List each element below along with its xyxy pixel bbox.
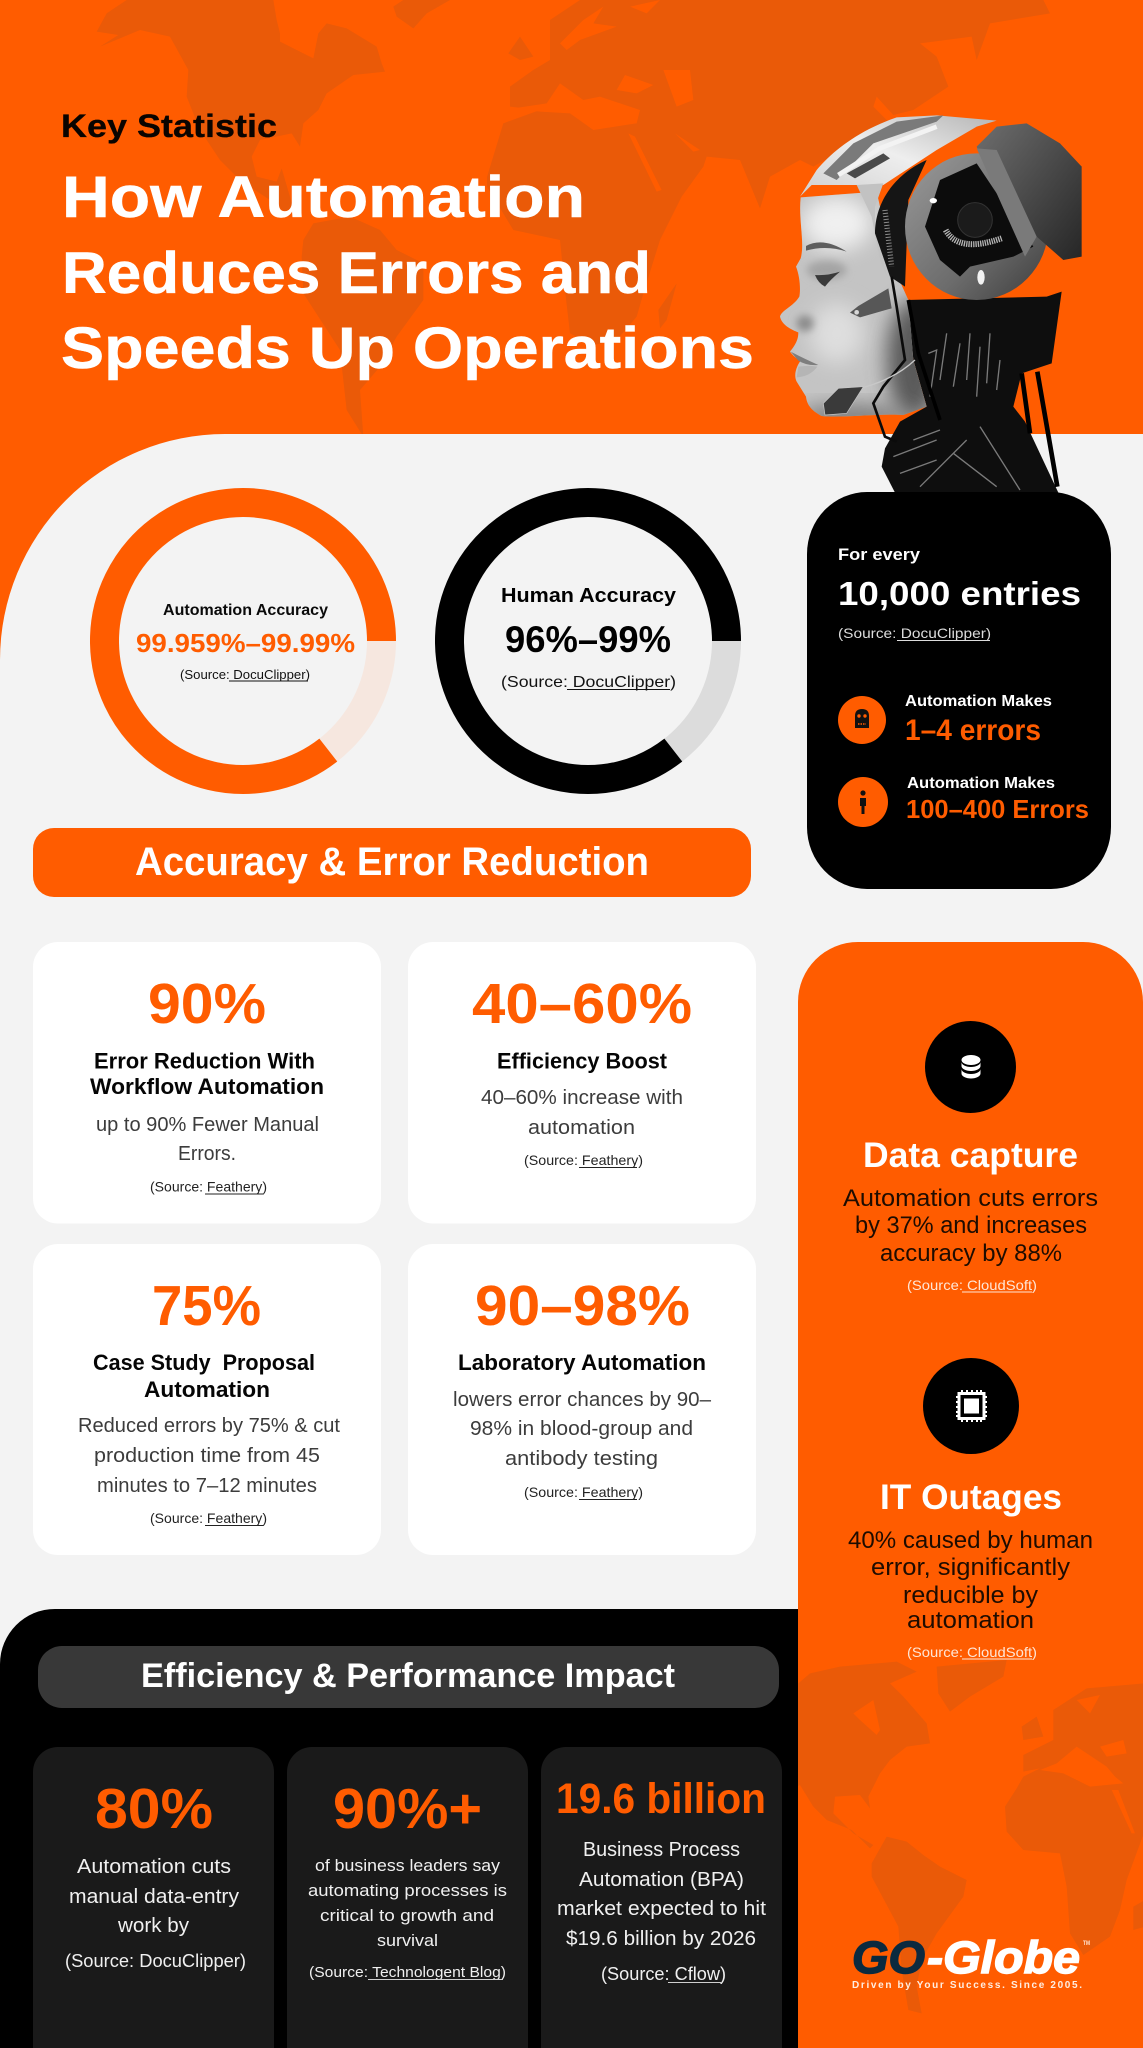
panel: orange side column bbox=[797, 942, 1143, 2048]
panel: for every 10,000 entries: (Source: DocuClipper) bbox=[838, 625, 991, 641]
stat: automation errors bbox=[905, 693, 1052, 747]
header background bbox=[0, 0, 1143, 700]
card: 90-98% laboratory automation: 90–98% bbox=[475, 1274, 690, 1338]
data capture text: accuracy by 88% bbox=[880, 1240, 1062, 1267]
card: 19.6 billion BPA market: 19.6 billion bbox=[556, 1775, 766, 1823]
card: 80% data entry: (Source: DocuClipper) bbox=[65, 1951, 246, 1971]
donut: human accuracy: Human Accuracy bbox=[501, 585, 677, 607]
card: 40-60% efficiency boost: 40–60% bbox=[472, 972, 692, 1036]
donut: automation accuracy bbox=[104, 502, 382, 780]
heading: accuracy and error reduction: Accuracy & Error Reduction bbox=[135, 840, 649, 884]
panel: for every 10,000 entries bbox=[807, 492, 1111, 889]
card: 90-98% laboratory automation: Laboratory Automation bbox=[458, 1350, 706, 1375]
it outages text: IT Outages bbox=[880, 1478, 1062, 1517]
it outages text: automation bbox=[907, 1607, 1034, 1634]
data capture text bbox=[843, 1136, 1098, 1293]
panel: for every 10,000 entries: 10,000 entries bbox=[838, 575, 1081, 612]
stat: human errors: Automation Makes bbox=[907, 775, 1055, 792]
logo: GO-Globe: Driven by Your Success. Since 2005. bbox=[852, 1980, 1082, 1991]
title: How Automation bbox=[62, 165, 585, 230]
card: 40-60% efficiency boost bbox=[408, 942, 756, 1224]
header: key statistic label: Key Statistic bbox=[61, 108, 277, 144]
card: 75% proposal automation: Reduced errors by 75% & cut bbox=[78, 1415, 340, 1437]
icon: robot face bbox=[838, 696, 886, 744]
card: 75% proposal automation: 75% bbox=[152, 1274, 261, 1338]
light page background with curved corner bbox=[0, 434, 1143, 2048]
donut: automation accuracy: 99.959%–99.99% bbox=[136, 628, 355, 658]
panel: efficiency and performance (black) bbox=[0, 1609, 800, 2048]
it outages text: reducible by bbox=[903, 1582, 1038, 1609]
decorative world map in side panel bbox=[797, 1660, 1143, 2013]
title: Reduces Errors and bbox=[62, 241, 651, 306]
card: 90% error reduction: Workflow Automation bbox=[90, 1074, 324, 1099]
icon: person bbox=[838, 777, 888, 827]
it outages text: (Source: CloudSoft) bbox=[907, 1644, 1037, 1660]
logo: GO-Globe: GO bbox=[852, 1932, 925, 1983]
logo: GO-Globe: -Globe bbox=[927, 1932, 1080, 1983]
stat: human errors: 100–400 Errors bbox=[906, 794, 1089, 824]
card: 75% proposal automation: production time from 45 bbox=[94, 1445, 320, 1467]
card: 90-98% laboratory automation: (Source: Feathery) bbox=[524, 1484, 643, 1500]
card: 90% error reduction: 90% bbox=[148, 972, 266, 1036]
card: 90% error reduction: Errors. bbox=[178, 1143, 236, 1165]
decorative world map in header bbox=[97, 0, 1050, 437]
card: 19.6 billion BPA market: market expected to hit bbox=[557, 1898, 766, 1920]
card: 90%+ business leaders: 90%+ bbox=[333, 1777, 482, 1841]
stat: automation errors: Automation Makes bbox=[905, 693, 1052, 710]
data capture text: (Source: CloudSoft) bbox=[907, 1277, 1037, 1293]
card: 80% data entry: work by bbox=[117, 1915, 189, 1937]
logo: GO-Globe bbox=[852, 1932, 1090, 1991]
card: 75% proposal automation bbox=[33, 1244, 381, 1555]
card: 80% data entry: 80% bbox=[95, 1777, 213, 1841]
donut: automation accuracy: Automation Accuracy bbox=[163, 602, 328, 619]
data capture text: by 37% and increases bbox=[855, 1212, 1087, 1239]
it outages text bbox=[848, 1478, 1093, 1660]
icon: database bbox=[925, 1021, 1016, 1113]
card: 90%+ business leaders bbox=[287, 1747, 528, 2048]
stat: human errors bbox=[906, 775, 1089, 824]
donut: human accuracy: (Source: DocuClipper) bbox=[501, 674, 676, 691]
card: 90%+ business leaders: of business leaders say bbox=[315, 1856, 501, 1875]
card: 40-60% efficiency boost: 40–60% increase with bbox=[481, 1087, 683, 1109]
card: 90-98% laboratory automation: lowers error chances by 90– bbox=[453, 1389, 712, 1411]
donut: human accuracy: 96%–99% bbox=[505, 619, 671, 660]
card: 90%+ business leaders: (Source: Technologent Blog) bbox=[309, 1964, 506, 1981]
heading: accuracy and error reduction bbox=[33, 828, 751, 897]
card: 90%+ business leaders: survival bbox=[377, 1931, 438, 1950]
card: 90-98% laboratory automation: 98% in blood-group and bbox=[470, 1418, 693, 1440]
stat: automation errors: 1–4 errors bbox=[905, 714, 1041, 747]
illustration: robot woman profile bbox=[778, 115, 1082, 493]
card: 75% proposal automation: Automation bbox=[144, 1377, 270, 1402]
data capture text: Data capture bbox=[863, 1136, 1078, 1175]
it outages text: error, significantly bbox=[871, 1554, 1070, 1581]
donut: automation accuracy: (Source: DocuClipper) bbox=[180, 668, 310, 682]
panel: for every 10,000 entries: For every bbox=[838, 545, 921, 564]
card: 40-60% efficiency boost: (Source: Feathery) bbox=[524, 1152, 643, 1168]
icon: chip bbox=[923, 1358, 1019, 1454]
card: 90% error reduction bbox=[33, 942, 381, 1224]
card: 19.6 billion BPA market: $19.6 billion by 2026 bbox=[566, 1928, 756, 1950]
title: Speeds Up Operations bbox=[61, 316, 754, 381]
card: 90% error reduction: (Source: Feathery) bbox=[150, 1178, 267, 1194]
card: 19.6 billion BPA market: (Source: Cflow) bbox=[601, 1964, 726, 1984]
heading: efficiency and performance impact: Efficiency & Performance Impact bbox=[141, 1657, 675, 1695]
card: 75% proposal automation: minutes to 7–12 minutes bbox=[97, 1475, 317, 1497]
title bbox=[61, 165, 754, 381]
card: 90-98% laboratory automation bbox=[408, 1244, 756, 1555]
logo: GO-Globe: TM bbox=[1083, 1941, 1090, 1947]
data capture text: Automation cuts errors bbox=[843, 1185, 1098, 1212]
card: 90% error reduction: up to 90% Fewer Manual bbox=[96, 1114, 319, 1136]
card: 80% data entry: manual data-entry bbox=[69, 1886, 239, 1908]
card: 80% data entry bbox=[33, 1747, 274, 2048]
heading: efficiency and performance impact bbox=[38, 1646, 779, 1708]
card: 75% proposal automation: (Source: Feathery) bbox=[150, 1510, 267, 1526]
card: 40-60% efficiency boost: Efficiency Boost bbox=[497, 1048, 668, 1074]
card: 80% data entry: Automation cuts bbox=[77, 1856, 231, 1878]
card: 19.6 billion BPA market: Automation (BPA) bbox=[579, 1869, 744, 1891]
card: 90-98% laboratory automation: antibody testing bbox=[505, 1448, 658, 1470]
card: 40-60% efficiency boost: automation bbox=[528, 1117, 635, 1139]
card: 90%+ business leaders: automating processes is bbox=[308, 1881, 507, 1900]
it outages text: 40% caused by human bbox=[848, 1527, 1093, 1554]
donut: human accuracy bbox=[449, 502, 726, 780]
card: 75% proposal automation: Case Study Proposal bbox=[93, 1350, 315, 1375]
card: 19.6 billion BPA market: Business Process bbox=[583, 1839, 740, 1861]
card: 90% error reduction: Error Reduction With bbox=[94, 1048, 315, 1074]
card: 19.6 billion BPA market bbox=[541, 1747, 782, 2048]
card: 90%+ business leaders: critical to growth and bbox=[320, 1906, 494, 1925]
